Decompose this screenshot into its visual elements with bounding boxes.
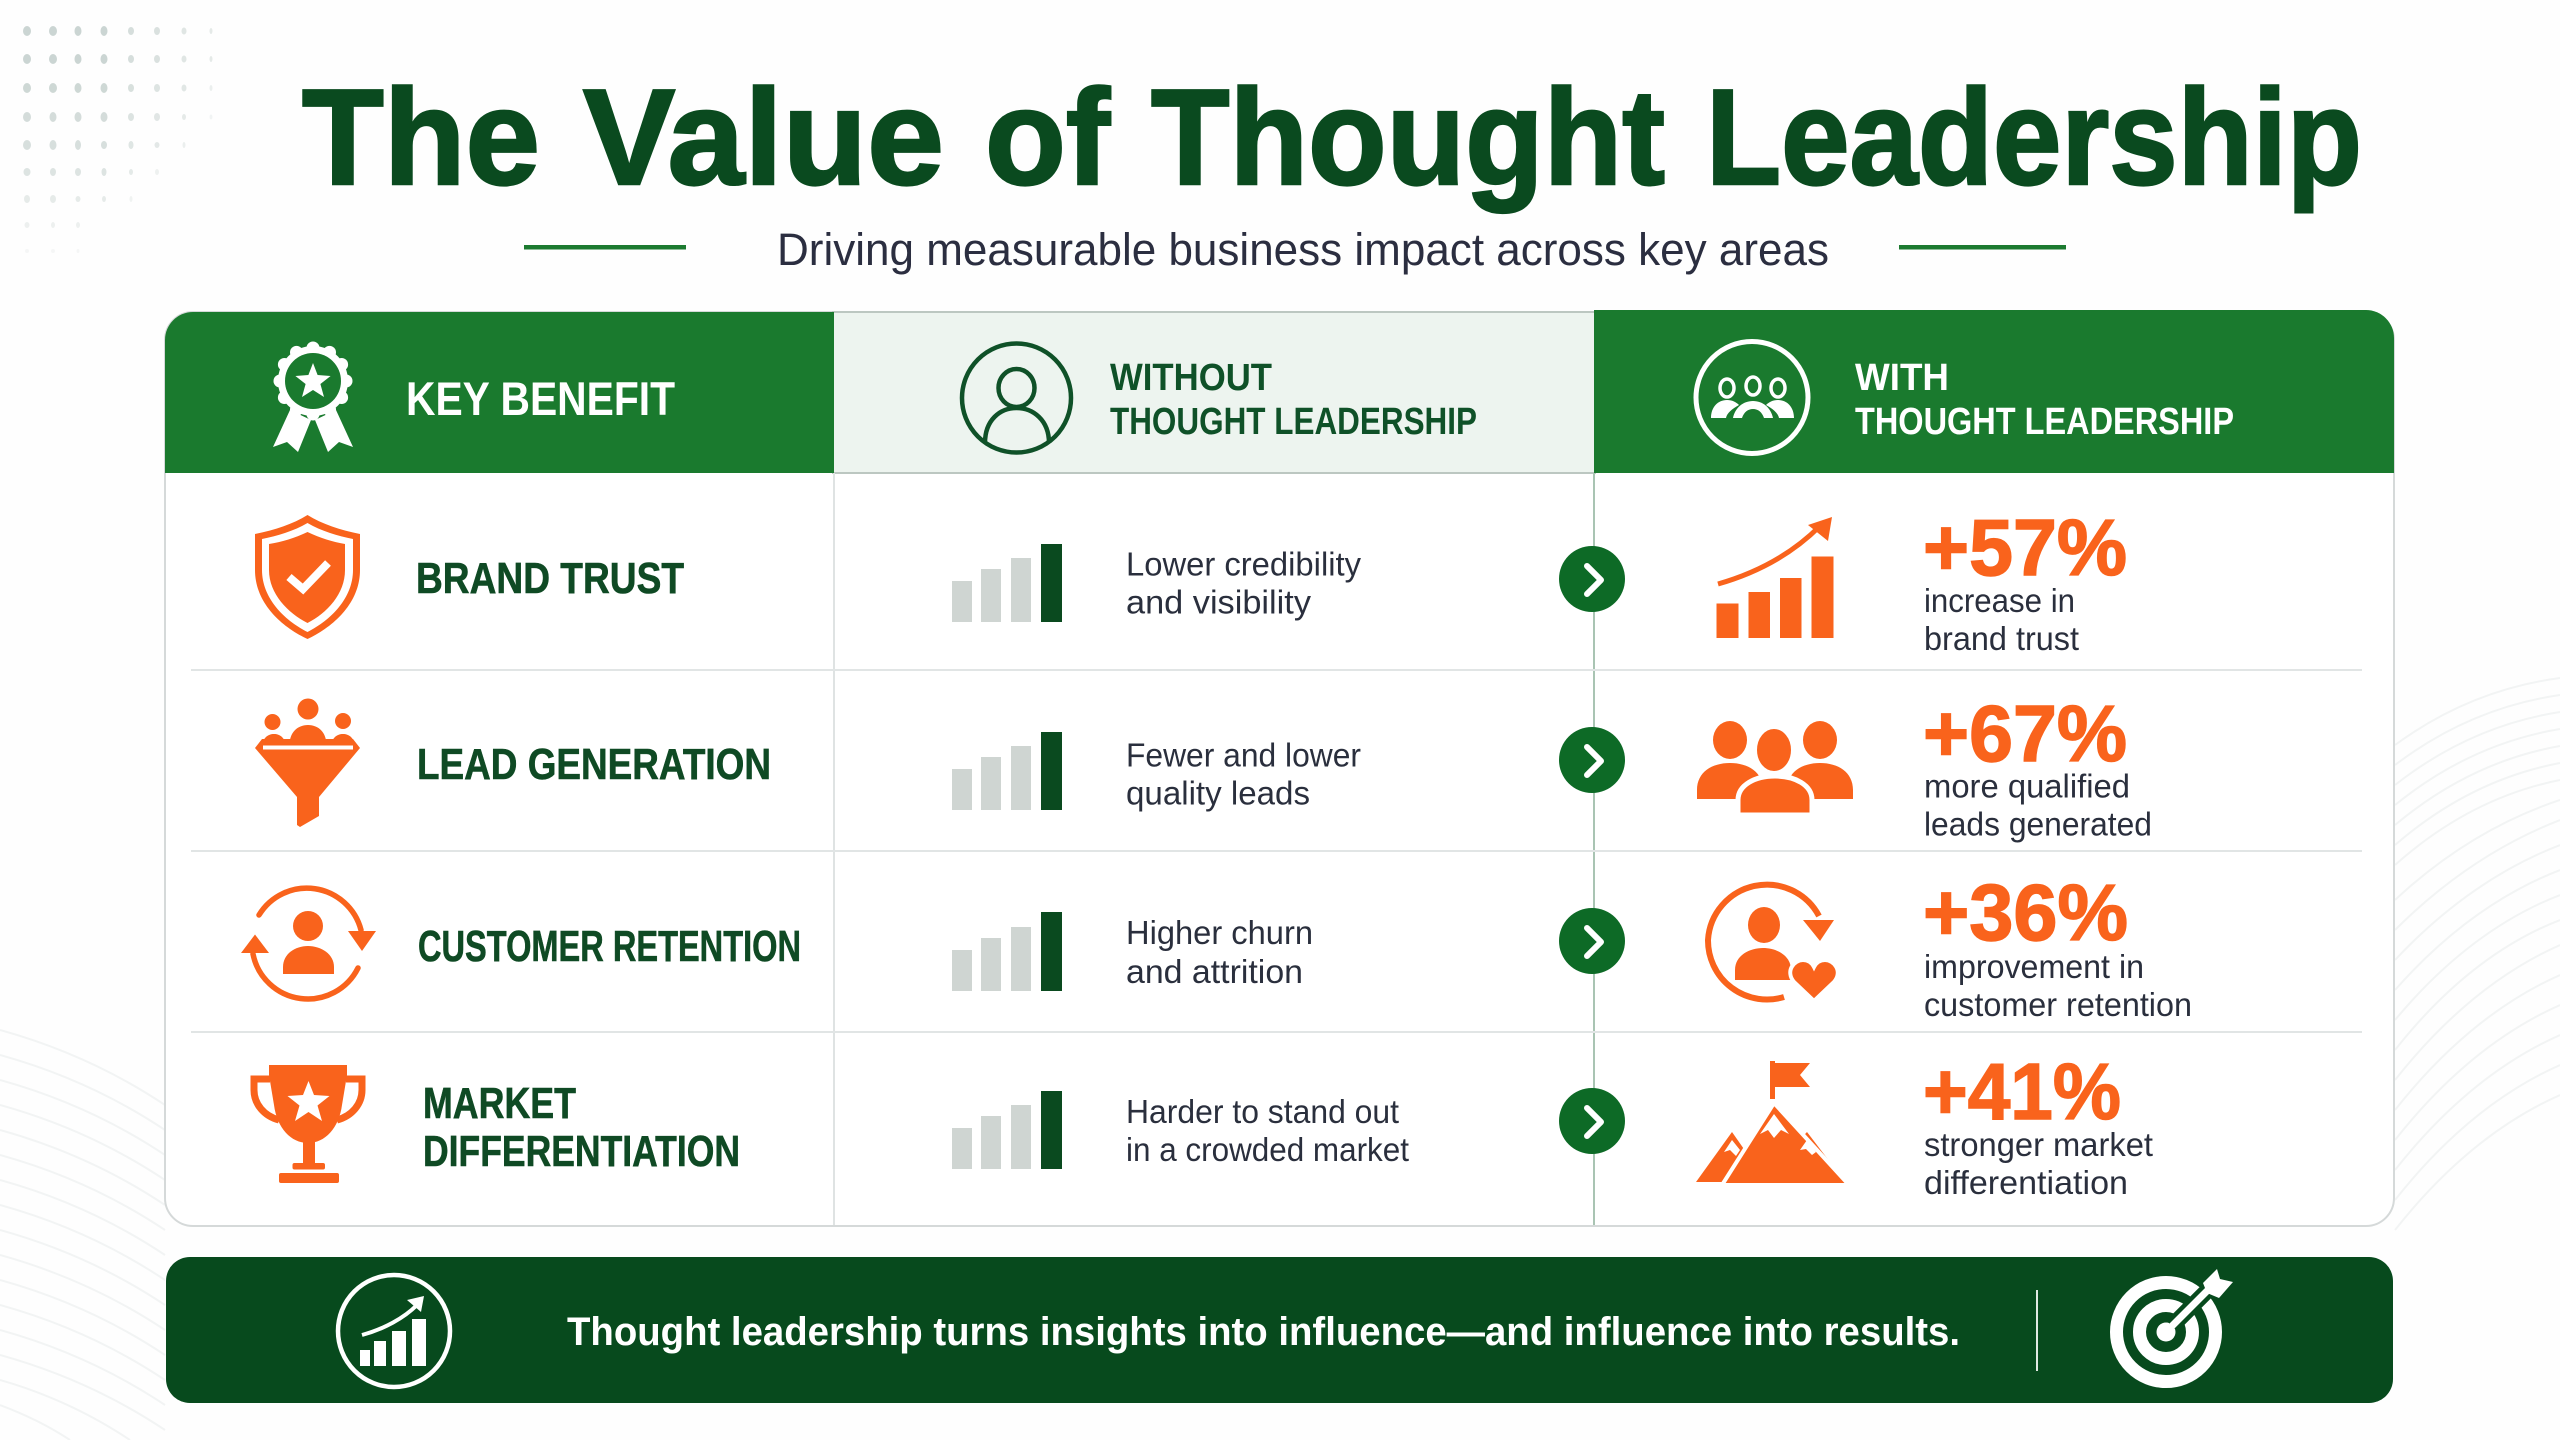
row: market differentiation: stronger market [1924, 1126, 2153, 1163]
row: brand trust: Lower credibility [1126, 546, 1361, 582]
subtitle [524, 224, 2066, 275]
arrow [1559, 727, 1625, 793]
bars: without, lead generation [952, 732, 1062, 810]
row: lead generation [255, 689, 2152, 842]
decorative dot grid [23, 26, 212, 253]
row: market differentiation [254, 1047, 2153, 1201]
title: Value [583, 61, 944, 213]
row: lead generation: LEAD GENERATION [417, 740, 771, 789]
icon: funnel with people [255, 698, 360, 827]
header: with thought leadership: WITH [1855, 357, 1949, 399]
bars: without, market differentiation [952, 1091, 1062, 1169]
arrow [1559, 546, 1625, 612]
title: Thought [1151, 61, 1665, 213]
row: market differentiation: MARKET [423, 1079, 576, 1128]
title: of [985, 61, 1111, 213]
icon: group in circle [1696, 342, 1808, 454]
icon: three people [1697, 721, 1853, 815]
arrow [1559, 1088, 1625, 1154]
row: market differentiation: +41% [1923, 1047, 2121, 1136]
icon: trophy [254, 1065, 362, 1183]
row: brand trust: +57% [1923, 503, 2127, 592]
banner: key takeaway [166, 1257, 2393, 1403]
icon: mountain with flag [1696, 1061, 1849, 1185]
header: with thought leadership [1594, 310, 2394, 473]
row: customer retention: CUSTOMER RETENTION [418, 922, 801, 971]
row: lead generation: more qualified [1924, 768, 2130, 804]
row: lead generation: quality leads [1126, 774, 1310, 812]
row: market differentiation: DIFFERENTIATION [423, 1127, 740, 1176]
row: market differentiation: differentiation [1924, 1164, 2128, 1201]
row: market differentiation: Harder to stand out [1126, 1093, 1399, 1130]
header: without thought leadership: WITHOUT [1110, 357, 1272, 399]
icon: growth chart [1716, 517, 1834, 638]
row: brand trust: BRAND TRUST [416, 554, 684, 603]
row: lead generation: Fewer and lower [1126, 736, 1361, 774]
header: key benefit: KEY BENEFIT [406, 372, 675, 425]
header: with thought leadership: THOUGHT LEADERSHIP [1855, 401, 2234, 443]
icon: award ribbon [273, 342, 353, 452]
bars: without, customer retention [952, 912, 1062, 991]
icon: person in cycle arrows [241, 888, 376, 999]
title [302, 61, 2362, 213]
row: customer retention: and attrition [1126, 953, 1303, 990]
title: Leadership [1706, 61, 2362, 213]
header: without thought leadership [833, 312, 1595, 473]
bars: without, brand trust [952, 544, 1062, 622]
banner: key takeaway: Thought leadership turns insights into influence—and influence into results. [567, 1310, 1960, 1354]
row: market differentiation: in a crowded market [1126, 1131, 1409, 1168]
icon: shield with check [255, 515, 360, 639]
row: lead generation: leads generated [1924, 806, 2152, 842]
row: customer retention: Higher churn [1126, 914, 1313, 951]
row: brand trust [255, 503, 2127, 657]
arrow [1559, 908, 1625, 974]
title: The [302, 61, 540, 213]
header: key benefit [165, 312, 834, 473]
subtitle: Driving measurable business impact across key areas [777, 224, 1829, 275]
icon: target with arrow [2116, 1269, 2233, 1382]
panel: comparison table [165, 310, 2394, 1226]
row: customer retention: +36% [1923, 868, 2128, 957]
row: customer retention [241, 868, 2192, 1023]
header: without thought leadership: THOUGHT LEADERSHIP [1110, 401, 1477, 443]
row: lead generation: +67% [1923, 689, 2127, 778]
icon: person, loop and heart [1708, 885, 1838, 1001]
row: brand trust: brand trust [1924, 620, 2079, 657]
icon: growth chart in circle [338, 1275, 450, 1387]
row: customer retention: customer retention [1924, 986, 2192, 1023]
row: brand trust: increase in [1924, 582, 2075, 619]
row: customer retention: improvement in [1924, 948, 2144, 985]
row: brand trust: and visibility [1126, 584, 1312, 620]
